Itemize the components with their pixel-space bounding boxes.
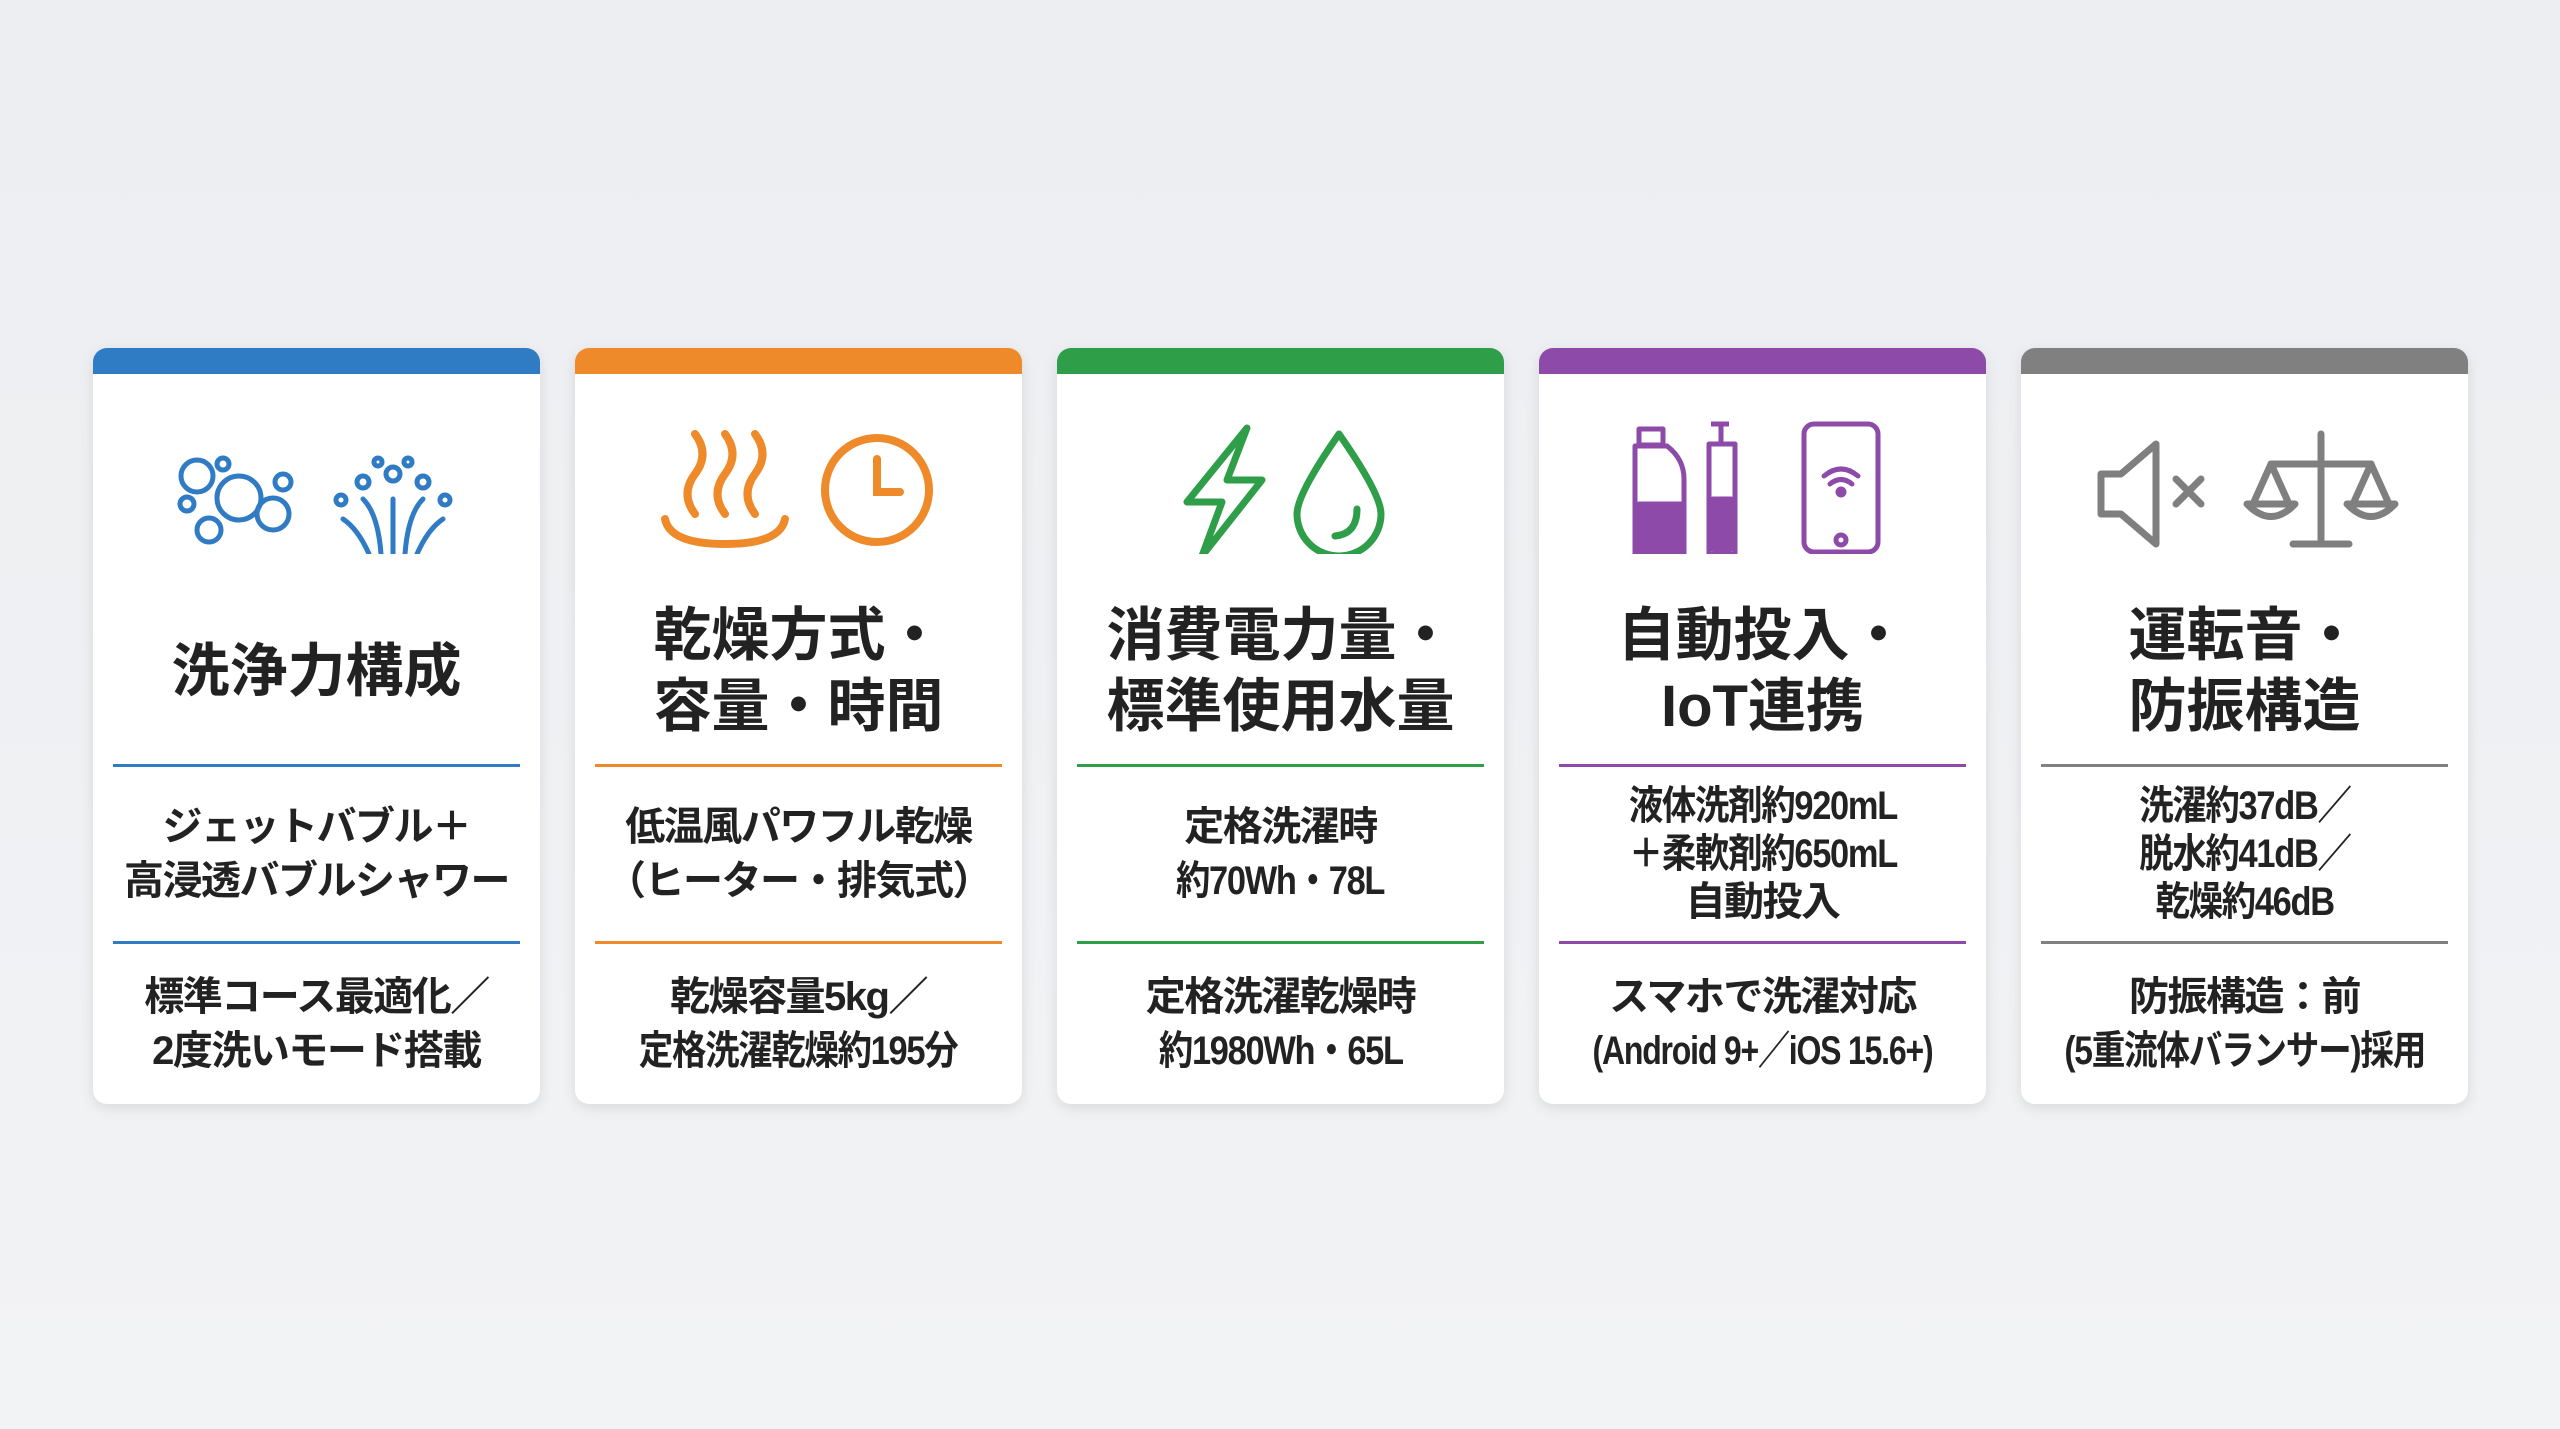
- text: method: [606, 804, 991, 902]
- card: cleaning power: [93, 348, 540, 1104]
- text: detergent: [1628, 784, 1898, 924]
- text: wash-dry: 定格洗濯乾燥時: [1146, 974, 1415, 1018]
- text: bubble: ジェットバブル＋: [162, 804, 470, 848]
- text: balancer: 防振構造：前: [2129, 974, 2360, 1018]
- heading: IoT連携: [1661, 674, 1864, 739]
- text: method: （ヒーター・排気式）: [606, 858, 991, 902]
- text: capacity: 定格洗濯乾燥約195分: [639, 1028, 958, 1072]
- text: wash-dry: 約1980Wh・65L: [1159, 1028, 1402, 1072]
- heading: [1106, 603, 1454, 739]
- card: auto dosing / IoT: [1539, 348, 1986, 1104]
- text: balancer: (5重流体バランサー)採用: [2064, 1028, 2425, 1072]
- heading: 洗浄力構成: [171, 638, 462, 704]
- text: smartphone: [1593, 974, 1932, 1072]
- text: balancer: [2064, 974, 2425, 1072]
- text: smartphone: スマホで洗濯対応: [1609, 974, 1916, 1018]
- text: course: 標準コース最適化／: [144, 974, 489, 1018]
- text: capacity: 乾燥容量5kg／: [670, 974, 927, 1018]
- heading: [653, 603, 944, 739]
- icon: bubbles and shower: [178, 456, 452, 554]
- text: noise levels: [2139, 784, 2351, 924]
- text: noise levels: 洗濯約37dB／: [2139, 784, 2350, 828]
- card: drying: [575, 348, 1022, 1104]
- icon: detergent bottles and phone: [1632, 422, 1880, 554]
- heading: [1617, 603, 1908, 739]
- text: smartphone: (Android 9+／iOS 15.6+): [1593, 1028, 1932, 1072]
- card: noise / anti-vibration: [2021, 348, 2468, 1104]
- text: noise levels: 脱水約41dB／: [2139, 832, 2350, 876]
- heading: 乾燥方式・: [653, 603, 944, 668]
- text: detergent: 自動投入: [1686, 880, 1840, 924]
- icon: mute speaker and scale: [2098, 430, 2398, 548]
- text: wash-dry: [1146, 974, 1416, 1072]
- heading: 標準使用水量: [1106, 674, 1454, 739]
- text: noise levels: 乾燥約46dB: [2155, 880, 2334, 924]
- text: course: [144, 974, 490, 1072]
- card: power and water: [1057, 348, 1504, 1104]
- heading: 自動投入・: [1617, 603, 1908, 668]
- text: detergent: 液体洗剤約920mL: [1628, 784, 1897, 828]
- heading: 容量・時間: [653, 674, 944, 739]
- icon: heat and clock: [661, 430, 933, 548]
- text: method: 低温風パワフル乾燥: [625, 804, 972, 848]
- text: wash: 約70Wh・78L: [1176, 858, 1385, 902]
- heading: 運転音・: [2128, 603, 2360, 668]
- text: detergent: ＋柔軟剤約650mL: [1628, 832, 1897, 876]
- text: bubble: [124, 804, 509, 902]
- text: capacity: [639, 974, 958, 1072]
- text: wash: 定格洗濯時: [1184, 804, 1377, 848]
- icon: lightning and drop: [1184, 424, 1384, 554]
- heading: [2128, 603, 2360, 739]
- text: wash: [1176, 804, 1385, 902]
- heading: 防振構造: [2128, 674, 2360, 739]
- text: bubble: 高浸透バブルシャワー: [124, 858, 509, 902]
- heading: 消費電力量・: [1106, 603, 1454, 668]
- text: course: 2度洗いモード搭載: [152, 1028, 481, 1072]
